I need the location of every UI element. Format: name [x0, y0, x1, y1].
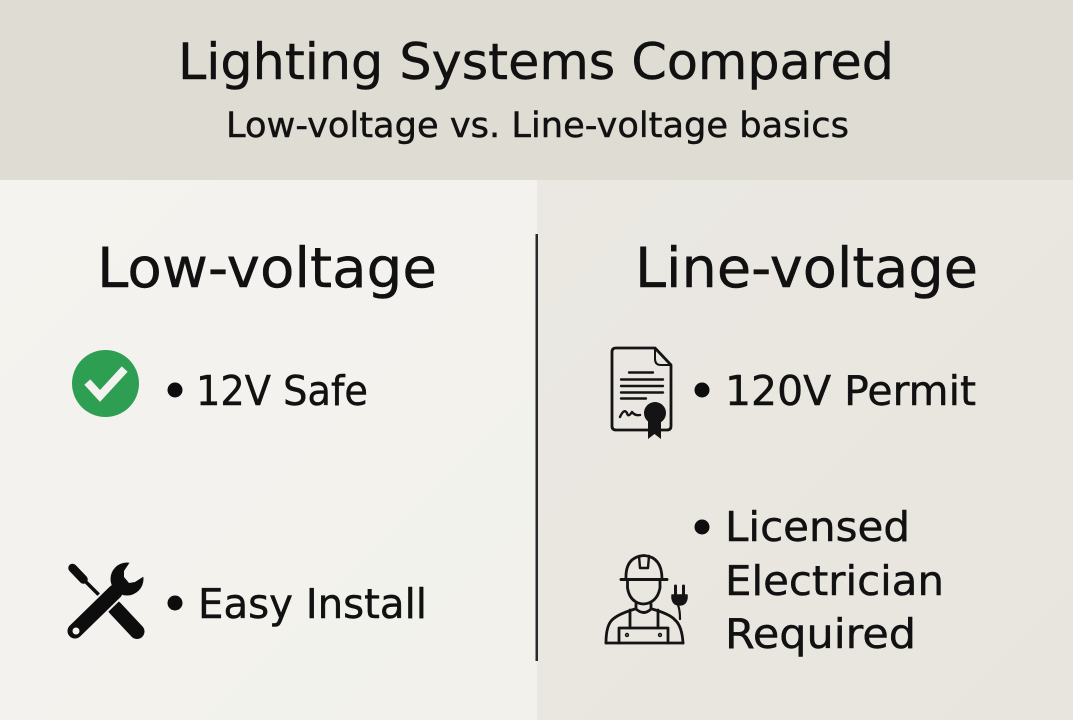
list item: 120V Permit: 120V Permit	[725, 367, 976, 415]
list item: 12V Safe: 12V Safe	[196, 367, 368, 415]
icon: green check circle	[72, 350, 139, 417]
heading: low-voltage: Low-voltage	[97, 236, 437, 300]
panel: left low-voltage background	[0, 180, 537, 720]
list item: Licensed Electrician Required	[694, 503, 944, 658]
header band	[0, 0, 1073, 180]
list item: Licensed Electrician Required: Required	[725, 610, 916, 658]
list item: Licensed Electrician Required: Licensed	[725, 503, 910, 551]
heading: line-voltage: Line-voltage	[635, 236, 978, 300]
center divider	[536, 234, 538, 661]
list item: Licensed Electrician Required: Electrician	[725, 557, 944, 605]
icon: electrician with plug	[606, 556, 687, 643]
subtitle: Low-voltage vs. Line-voltage basics	[226, 106, 849, 146]
icon: crossed screwdriver and wrench	[72, 556, 149, 634]
list item: Easy Install: Easy Install	[198, 580, 427, 628]
panel: right line-voltage background	[537, 180, 1073, 720]
icon: permit document	[612, 348, 671, 439]
title: Lighting Systems Compared	[178, 33, 894, 91]
